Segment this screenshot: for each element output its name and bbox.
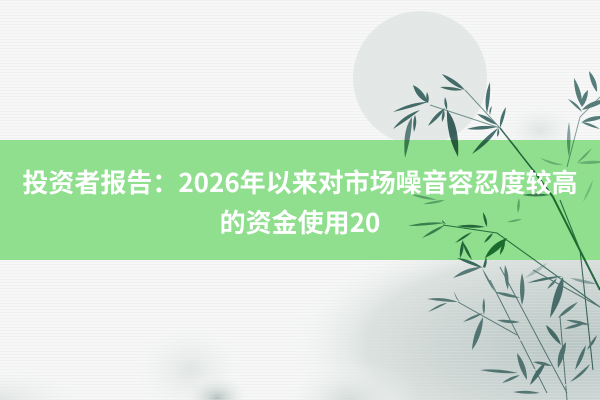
title: 投资者报告：2026年以来对市场噪音容忍度较高 xyxy=(22,163,578,200)
mist xyxy=(0,102,600,400)
lower bamboo cluster xyxy=(427,263,600,400)
upper bamboo branch xyxy=(393,74,533,170)
white speckles xyxy=(439,339,593,396)
green title banner xyxy=(0,140,600,260)
moon xyxy=(353,11,487,145)
title xyxy=(22,163,578,240)
title: 的资金使用20 xyxy=(220,203,380,240)
right bamboo branch xyxy=(540,71,600,167)
middle bamboo branch xyxy=(408,170,600,370)
